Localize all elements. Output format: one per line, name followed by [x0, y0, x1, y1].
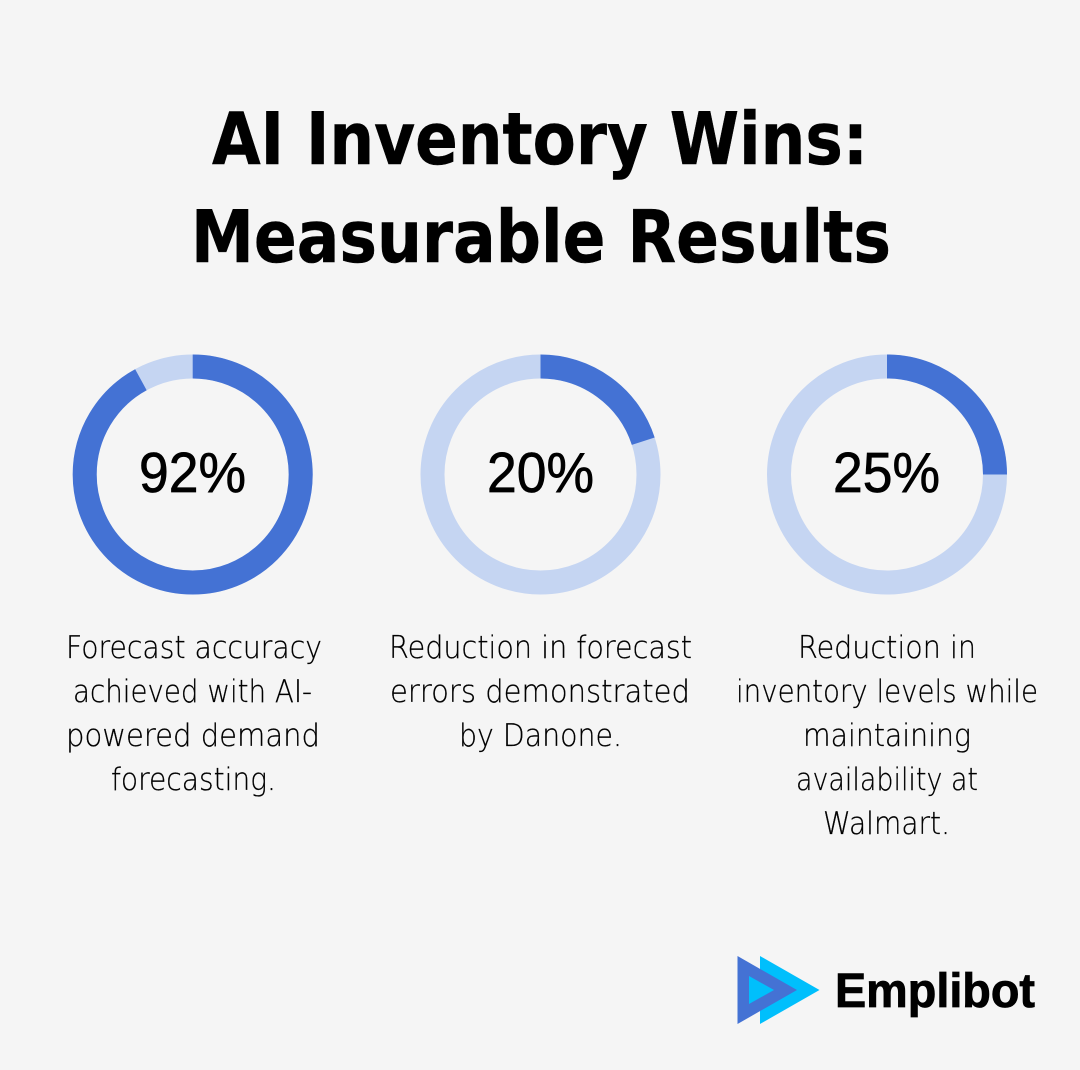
- panel: forecast accuracy: [66, 366, 322, 798]
- donut chart: 25%: [779, 366, 995, 582]
- description: forecast accuracy: forecasting.: [111, 762, 276, 798]
- stat: 92%: 92%: [139, 441, 246, 505]
- icon: play triangles: [738, 956, 820, 1024]
- description: forecast accuracy: [66, 630, 322, 798]
- description: forecast errors: errors demonstrated: [390, 674, 690, 710]
- description: forecast accuracy: achieved with AI-: [73, 674, 312, 710]
- description: inventory levels: Walmart.: [823, 806, 950, 842]
- description: forecast errors: by Danone.: [459, 718, 622, 754]
- description: inventory levels: [736, 630, 1038, 842]
- description: forecast errors: [389, 630, 692, 754]
- panel: forecast errors: [389, 366, 692, 754]
- donut chart: 20%: [432, 366, 648, 582]
- stat: 20%: 20%: [487, 441, 594, 505]
- wordmark: Emplibot: [835, 965, 1035, 1018]
- title: [191, 97, 891, 279]
- donut chart: 92%: [85, 366, 301, 582]
- stat: 25%: 25%: [833, 441, 940, 505]
- description: inventory levels: Reduction in: [798, 630, 976, 666]
- title: Measurable Results: [191, 195, 891, 279]
- logo: Emplibot: [738, 956, 1035, 1024]
- title: AI Inventory Wins:: [212, 97, 868, 181]
- panel: inventory levels: [736, 366, 1038, 842]
- description: forecast accuracy: Forecast accuracy: [66, 630, 322, 666]
- description: inventory levels: maintaining: [803, 718, 971, 754]
- description: inventory levels: inventory levels while: [736, 674, 1038, 710]
- description: inventory levels: availability at: [796, 762, 978, 798]
- description: forecast errors: Reduction in forecast: [389, 630, 692, 666]
- description: forecast accuracy: powered demand: [66, 718, 320, 754]
